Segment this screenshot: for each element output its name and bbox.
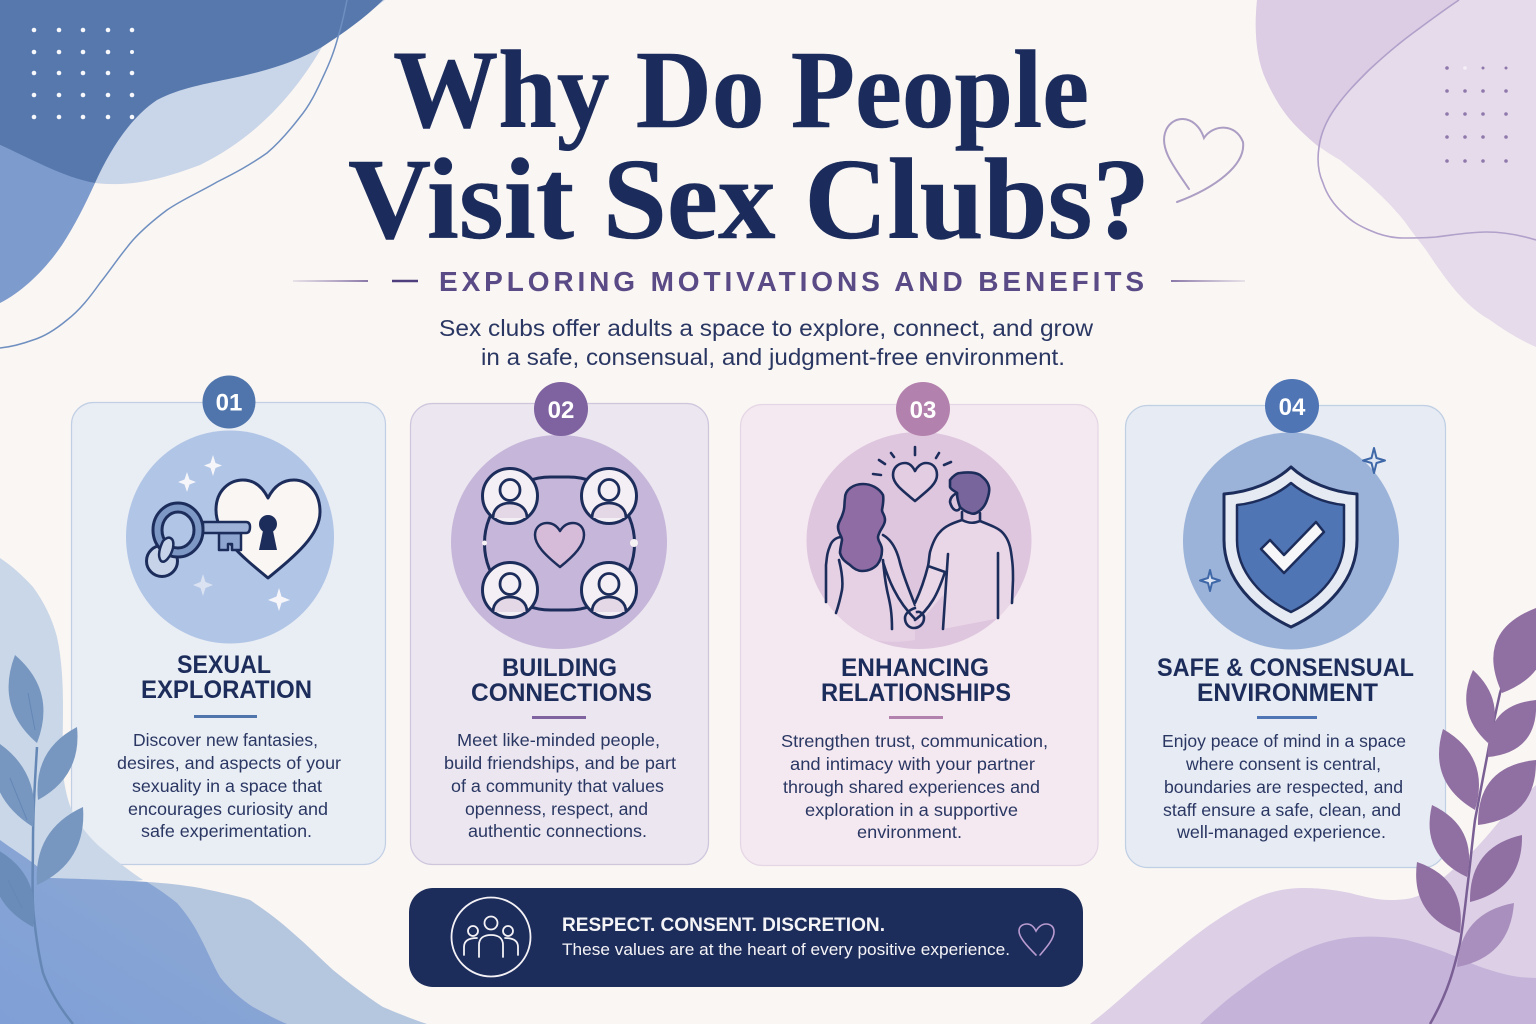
person top right xyxy=(582,468,636,524)
intro text xyxy=(439,315,1093,370)
panel: building connections xyxy=(410,382,708,864)
number badge 01 xyxy=(202,376,256,428)
text: card 2: build friendships, and be part xyxy=(444,753,676,773)
heading: card 2: CONNECTIONS xyxy=(471,679,652,707)
callout text: RESPECT. CONSENT. DISCRETION. xyxy=(562,915,885,936)
number badge 04: 04 xyxy=(1279,394,1306,421)
heading: card 1 xyxy=(141,651,312,704)
icon circle: card 4 xyxy=(1183,432,1399,650)
text: card 1: sexuality in a space that xyxy=(132,776,322,796)
icon: key and heart xyxy=(146,480,320,578)
heading: card 4: SAFE & CONSENSUAL xyxy=(1157,654,1414,682)
text: card 3: environment. xyxy=(857,822,962,842)
icon: group in circle xyxy=(452,898,530,976)
plant: left leaves xyxy=(0,655,83,1024)
text: card 3: and intimacy with your partner xyxy=(790,754,1035,774)
title xyxy=(348,29,1150,264)
text: card 2: of a community that values xyxy=(451,776,664,796)
background shapes: top right xyxy=(1256,0,1536,347)
text: card 3: Strengthen trust, communication, xyxy=(781,731,1048,751)
title: Visit Sex Clubs? xyxy=(348,136,1150,264)
icon: shield with check xyxy=(1224,467,1357,627)
heading: card 3: ENHANCING xyxy=(841,654,989,682)
icon: heart outline xyxy=(1019,924,1054,955)
icon: sparkles card 1 xyxy=(178,455,290,611)
number badge 03: 03 xyxy=(910,397,936,424)
icon: sparkles card 4 xyxy=(1200,448,1385,591)
plant: right leaves xyxy=(1416,608,1536,1024)
dot grid: top left xyxy=(32,28,134,119)
person top left xyxy=(482,468,538,524)
woman xyxy=(826,484,915,642)
text: card 4: well-managed experience. xyxy=(1176,822,1386,842)
text: card 1: encourages curiosity and xyxy=(128,799,328,819)
text: card 4: Enjoy peace of mind in a space xyxy=(1162,731,1406,751)
intro text: in a safe, consensual, and judgment-free environment. xyxy=(481,344,1065,370)
text: card 1: safe experimentation. xyxy=(141,821,312,841)
heading: card 2: BUILDING xyxy=(502,654,617,682)
heading: card 4: ENVIRONMENT xyxy=(1197,679,1378,707)
text: card 4 xyxy=(1162,731,1406,842)
subtitle: EXPLORING MOTIVATIONS AND BENEFITS xyxy=(439,266,1144,297)
heading: card 1: EXPLORATION xyxy=(141,676,312,704)
text: card 2: authentic connections. xyxy=(468,821,647,841)
text: card 3: through shared experiences and xyxy=(783,777,1040,797)
callout text xyxy=(562,915,1010,959)
text: card 4: boundaries are respected, and xyxy=(1164,777,1403,797)
callout bar xyxy=(409,888,1083,987)
icon: decorative heart outline xyxy=(1164,119,1243,202)
number badge 03 xyxy=(896,382,950,436)
icon: community network xyxy=(482,468,638,618)
text: card 1 xyxy=(117,730,341,841)
icon circle: card 2 xyxy=(451,435,667,649)
person bottom right xyxy=(582,562,636,618)
heading: card 4 xyxy=(1157,654,1414,707)
heading: card 3 xyxy=(821,654,1011,707)
panel: safe and consensual environment xyxy=(1126,379,1446,868)
text: card 3: exploration in a supportive xyxy=(805,800,1018,820)
number badge 02: 02 xyxy=(548,397,574,424)
number badge 02 xyxy=(534,382,588,436)
title: Why Do People xyxy=(393,29,1089,152)
text: card 2: Meet like-minded people, xyxy=(457,730,660,750)
text: card 4: staff ensure a safe, clean, and xyxy=(1163,800,1401,820)
text: card 2: openness, respect, and xyxy=(465,799,648,819)
heart with rays xyxy=(873,447,951,501)
background shapes: bottom left xyxy=(0,558,427,1024)
heading: card 3: RELATIONSHIPS xyxy=(821,679,1011,707)
background shapes: bottom right xyxy=(1090,785,1536,1024)
icon circle: card 1 xyxy=(126,430,334,644)
man xyxy=(905,472,1013,629)
callout text: These values are at the heart of every positive experience. xyxy=(562,940,1010,959)
heading: card 2 xyxy=(471,654,652,707)
text: card 1: desires, and aspects of your xyxy=(117,753,341,773)
text: card 3 xyxy=(781,731,1048,842)
text: card 2 xyxy=(444,730,676,841)
panel: enhancing relationships xyxy=(740,382,1098,866)
icon: couple holding hands xyxy=(826,447,1013,642)
text: card 4: where consent is central, xyxy=(1185,754,1381,774)
person bottom left xyxy=(482,562,538,618)
intro text: Sex clubs offer adults a space to explore, connect, and grow xyxy=(439,315,1093,341)
background shapes: top left xyxy=(0,0,385,348)
icon circle: card 3 xyxy=(806,432,1032,649)
panel: sexual exploration xyxy=(72,376,386,864)
text: card 1: Discover new fantasies, xyxy=(133,730,318,750)
heading: card 1: SEXUAL xyxy=(177,651,271,679)
dot grid: top right xyxy=(1445,66,1508,163)
number badge 04 xyxy=(1265,379,1319,433)
number badge 01: 01 xyxy=(216,390,242,416)
